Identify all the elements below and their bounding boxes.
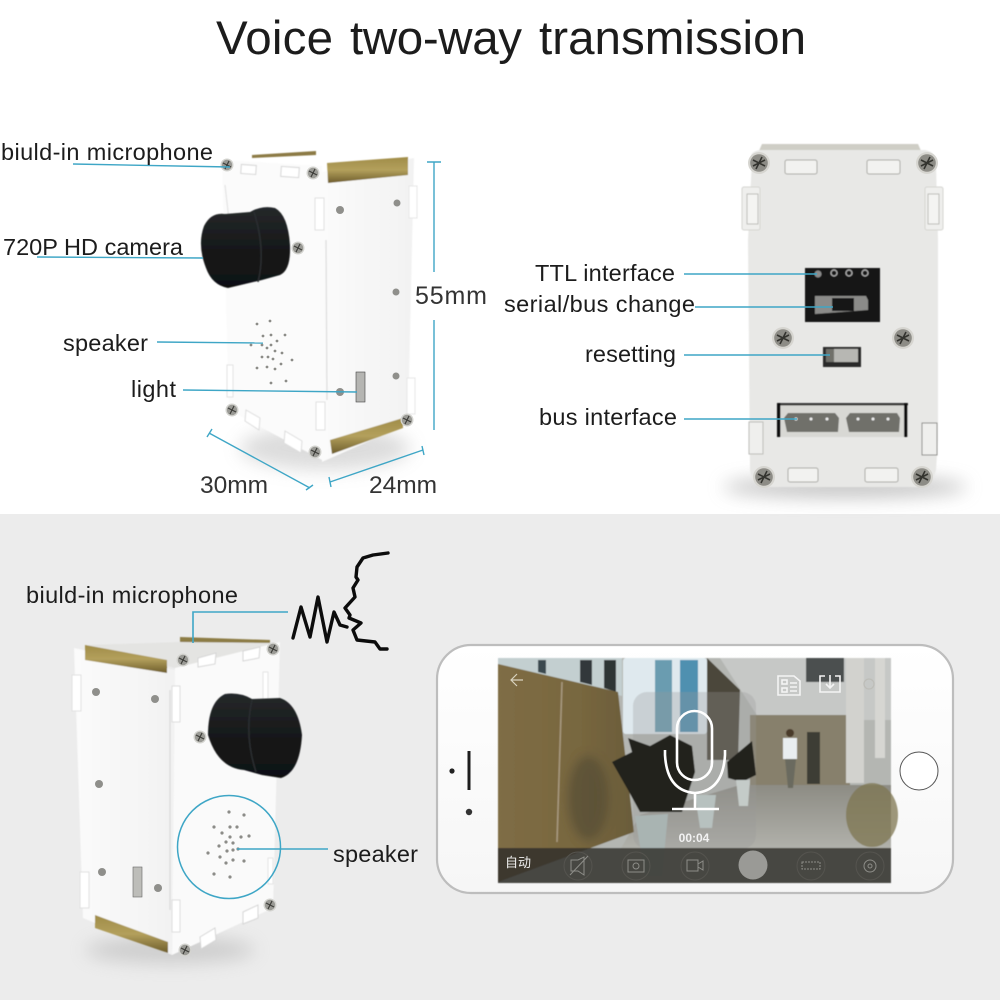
panel: smartphone [437, 645, 953, 893]
person [783, 729, 797, 788]
title: two-way [350, 12, 522, 65]
label: speaker: speaker [63, 330, 148, 356]
panel: voice device [26, 553, 418, 963]
plants [612, 735, 756, 812]
dimension: height: 55mm [415, 282, 487, 310]
phone sensor dot [466, 809, 472, 815]
camera lens [208, 694, 302, 778]
camera lens [201, 207, 290, 288]
talk button [738, 850, 768, 880]
label: TTL: TTL interface [535, 260, 675, 286]
side holes [92, 688, 162, 892]
callout lines [684, 274, 833, 419]
title: Voice [216, 12, 333, 65]
window strip [498, 658, 622, 696]
device 1 body [222, 151, 417, 462]
screws [220, 158, 414, 458]
icon: back arrow [511, 674, 523, 686]
left wall [498, 664, 634, 882]
label: microphone: biuld-in microphone [26, 582, 238, 608]
dimension: depth: 30mm [200, 472, 268, 499]
toolbar label: 自动 [505, 855, 531, 870]
back body [742, 144, 943, 487]
icon: microphone [665, 711, 725, 809]
icon: SD card [778, 676, 800, 695]
icon: download [820, 675, 840, 692]
ceiling [720, 658, 891, 720]
reset button [823, 347, 861, 367]
video screen [498, 658, 898, 883]
phone body [437, 645, 953, 893]
TTL and switch window [805, 268, 880, 322]
bus connectors [777, 403, 908, 437]
label: switch: serial/bus change [504, 291, 695, 317]
label: camera: 720P HD camera [3, 234, 184, 260]
label: reset: resetting [585, 341, 676, 367]
center window [623, 658, 707, 734]
floor reflection [846, 783, 898, 847]
side slot [133, 867, 142, 897]
timer: 00:04 [679, 831, 710, 845]
phone speaker [468, 751, 470, 790]
bottom toolbar [498, 848, 891, 883]
toolbar icons [564, 852, 884, 880]
icon: speaking face with sound wave [293, 553, 388, 649]
title: transmission [539, 12, 806, 65]
icon: top gear [864, 679, 874, 689]
panel: back of device [504, 144, 967, 498]
device 3 body [72, 637, 280, 955]
callout lines [193, 612, 328, 849]
vases [635, 814, 668, 876]
hall back wall [750, 715, 850, 790]
dimension: width: 24mm [369, 472, 437, 499]
label: microphone: biuld-in microphone [1, 139, 213, 165]
speaker highlight circle [178, 796, 280, 898]
label: light: light [131, 376, 176, 402]
phone camera dot [449, 768, 455, 774]
label: speaker: speaker [333, 841, 418, 867]
pillars [846, 658, 864, 783]
label: bus: bus interface [539, 404, 677, 430]
callout lines [37, 162, 441, 490]
light slot [356, 372, 365, 402]
floor [620, 785, 891, 850]
overlay panel [633, 692, 756, 849]
speaker holes [250, 320, 293, 384]
home button [900, 752, 938, 790]
holes on side face [336, 200, 400, 396]
lower panel background [0, 514, 1000, 1000]
panel: front device with dimensions [1, 139, 487, 499]
speaker holes [206, 810, 251, 879]
back screws [748, 152, 938, 488]
screws [176, 642, 280, 956]
